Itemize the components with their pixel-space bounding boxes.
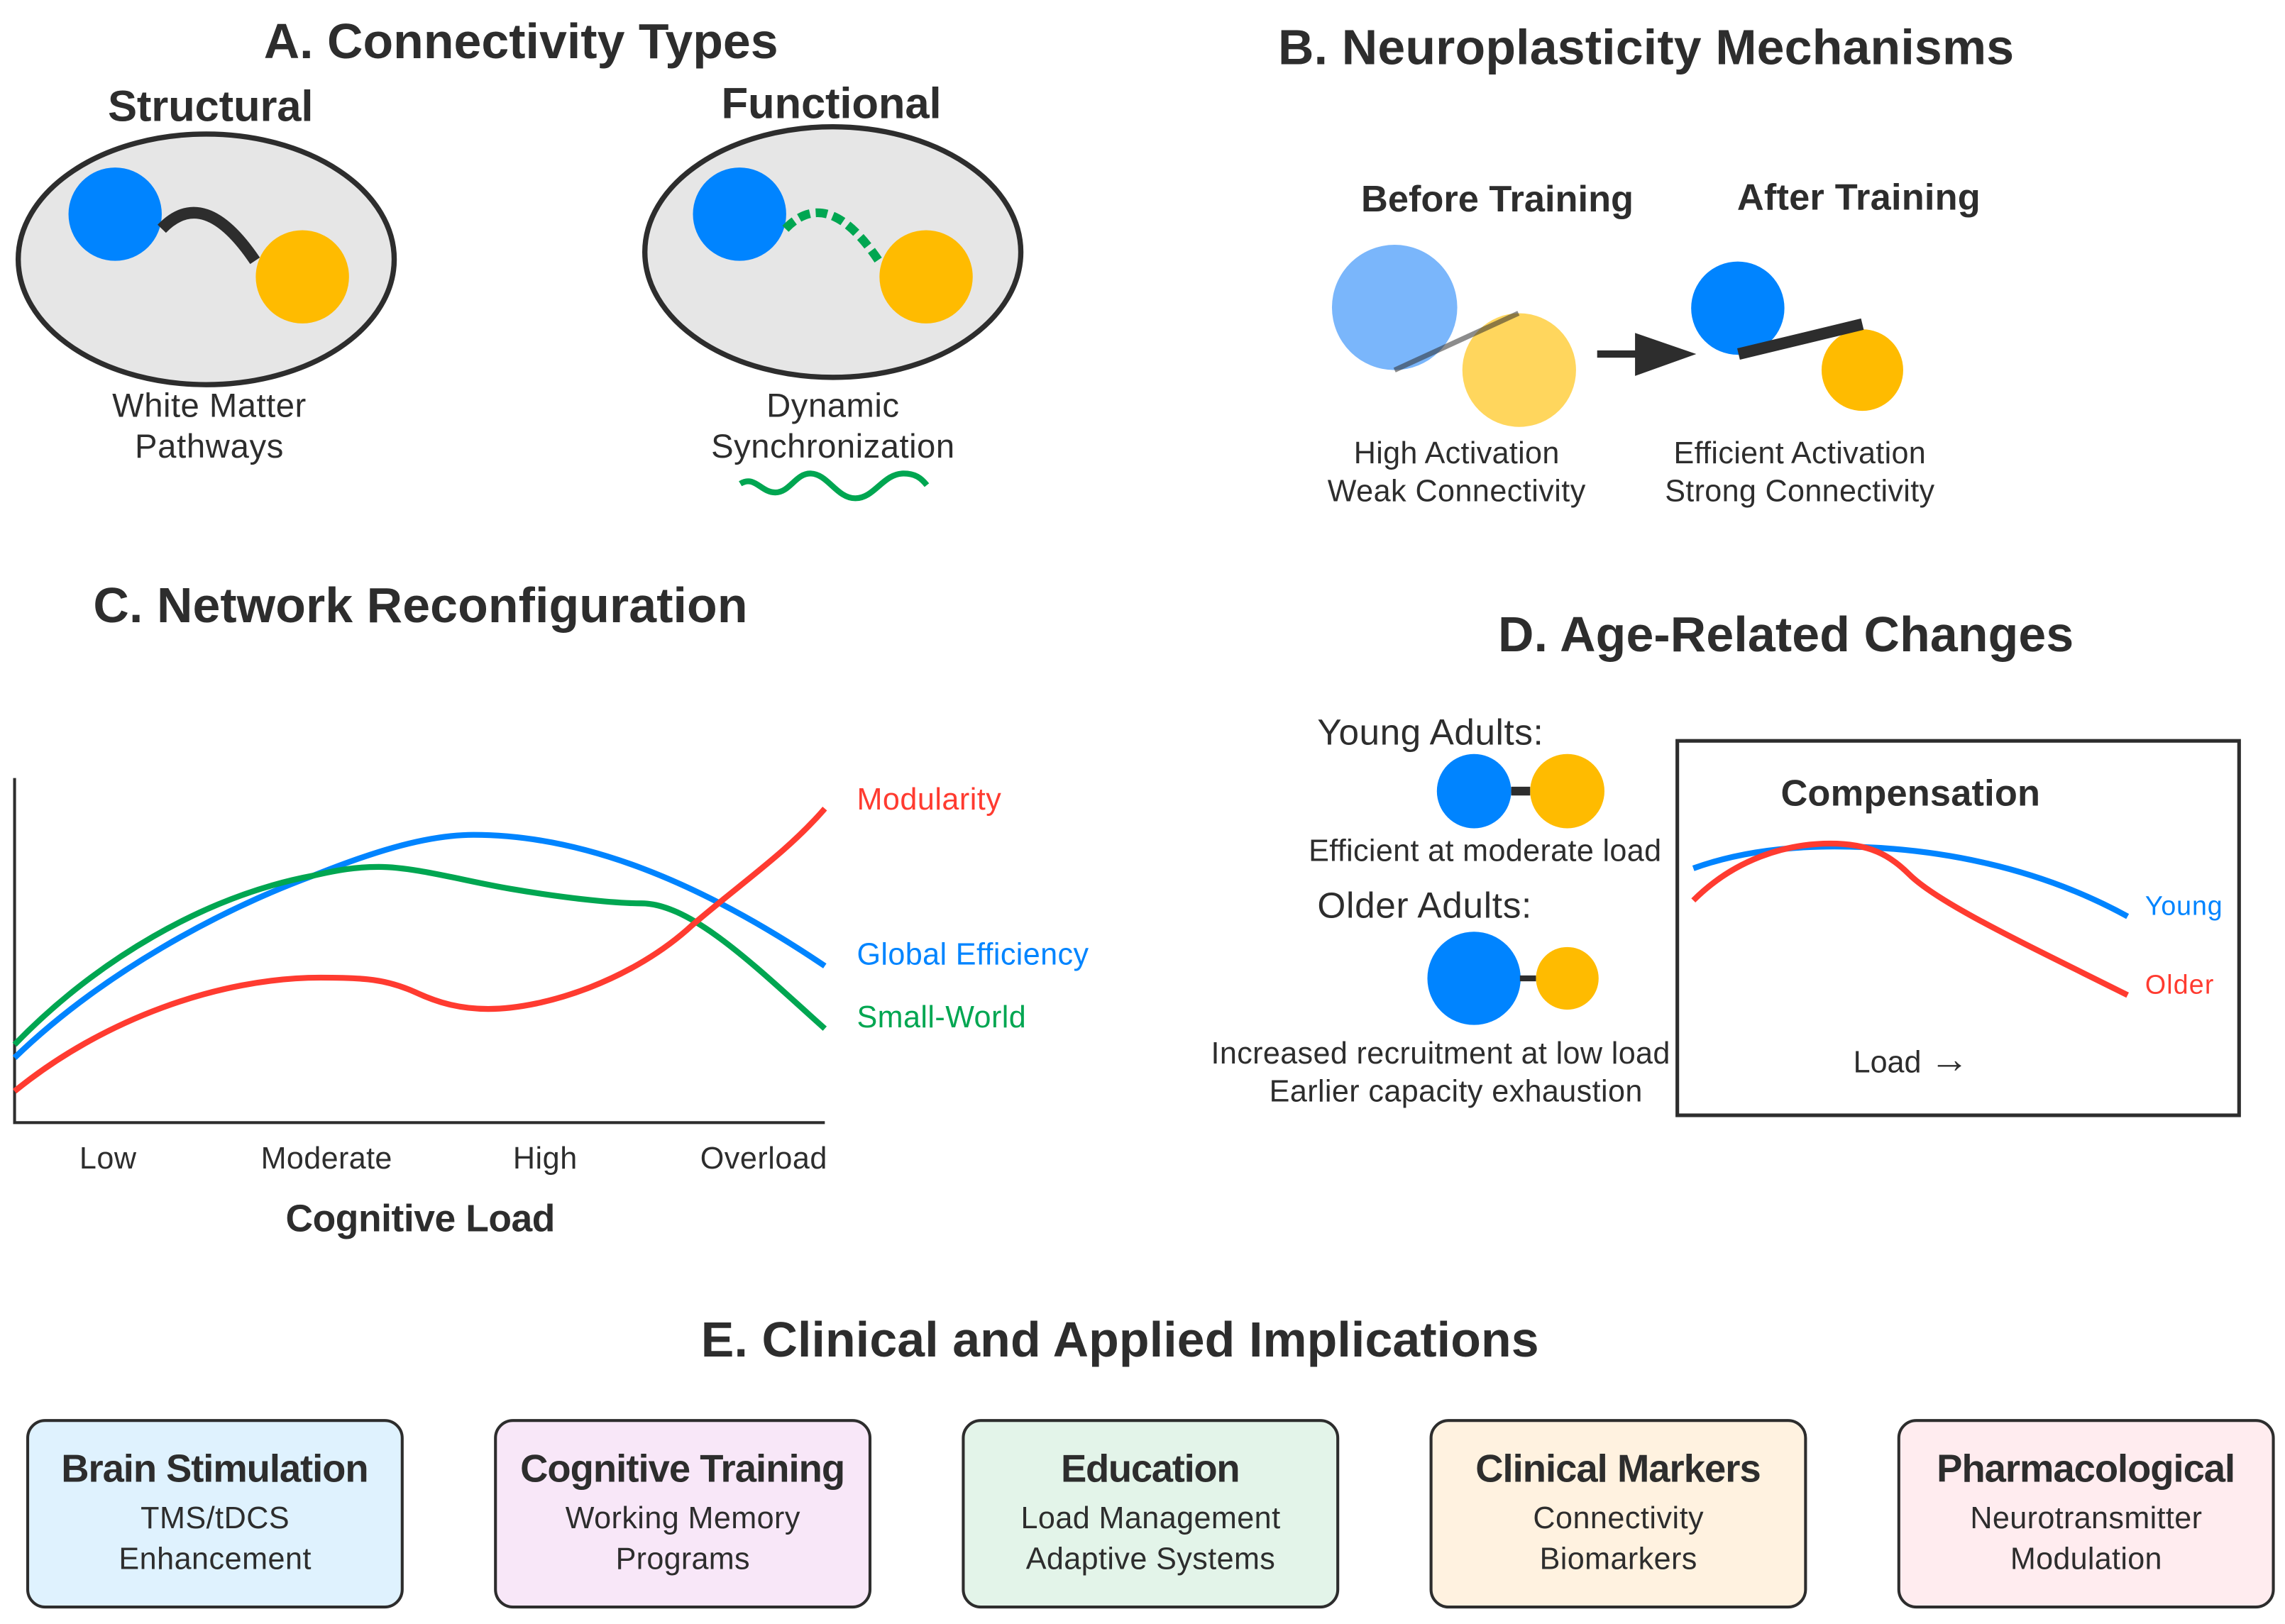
x-axis title: Cognitive Load xyxy=(286,1198,555,1239)
label: White Matter Pathways xyxy=(112,387,306,465)
card: Brain Stimulation xyxy=(28,1420,402,1607)
label: Young: Young xyxy=(2145,891,2223,921)
diagram: young adult nodes xyxy=(1437,754,1604,828)
line: small-world xyxy=(15,867,825,1044)
text: older adult description xyxy=(1211,1037,1670,1108)
heading: C. Network Reconfiguration: C. Network Reconfiguration xyxy=(93,578,747,633)
chart axes xyxy=(15,778,825,1122)
x-axis ticks: High xyxy=(513,1142,577,1176)
card: Clinical Markers: Biomarkers xyxy=(1540,1542,1697,1576)
label: Older Adults: Older Adults: xyxy=(1317,885,1531,926)
card: Clinical Markers: Clinical Markers xyxy=(1475,1447,1761,1490)
diagram: older adult nodes xyxy=(1427,932,1599,1025)
card: Education xyxy=(963,1420,1338,1607)
label: Older: Older xyxy=(2145,970,2213,1000)
label: Dynamic Synchronization: Synchronization xyxy=(711,428,954,465)
axis label: load: Load → xyxy=(1854,1037,1969,1081)
card: Pharmacological: Modulation xyxy=(2010,1542,2162,1576)
diagram: before training nodes xyxy=(1332,245,1576,427)
card: Pharmacological xyxy=(1899,1420,2274,1607)
label: before training caption: Weak Connectivity xyxy=(1328,474,1586,508)
diagram: after training nodes xyxy=(1691,262,1903,411)
panel: E. Clinical and Applied Implications xyxy=(28,1312,2274,1607)
arrow: before to after xyxy=(1597,333,1696,376)
text: efficient at moderate load: Efficient at moderate load xyxy=(1309,834,1661,868)
text: older adult description: Earlier capacity exhaustion xyxy=(1270,1074,1642,1108)
card: Cognitive Training xyxy=(495,1420,870,1607)
label: Modularity: Modularity xyxy=(857,783,1001,817)
card: Cognitive Training: Cognitive Training xyxy=(520,1447,845,1490)
line: young xyxy=(1693,846,2127,917)
chart: compensation xyxy=(1678,741,2239,1115)
label: Dynamic Synchronization: Dynamic xyxy=(766,387,899,424)
card: Clinical Markers xyxy=(1431,1420,1805,1607)
line: modularity xyxy=(15,809,825,1091)
card: Cognitive Training: Working Memory xyxy=(566,1501,800,1535)
panel: B. Neuroplasticity Mechanisms xyxy=(1278,19,2014,508)
label: after training caption: Efficient Activation xyxy=(1674,436,1926,470)
icon: synchronization wave xyxy=(740,473,927,498)
label: Young Adults: Young Adults: xyxy=(1317,712,1543,752)
label: Global Efficiency: Global Efficiency xyxy=(857,937,1089,971)
subheading: After Training: After Training xyxy=(1737,177,1981,219)
label: before training caption xyxy=(1328,436,1586,508)
label: White Matter Pathways: Pathways xyxy=(135,428,283,465)
card: Education: Education xyxy=(1061,1447,1240,1490)
card: Education: Adaptive Systems xyxy=(1026,1542,1275,1576)
heading: E. Clinical and Applied Implications: E. Clinical and Applied Implications xyxy=(701,1312,1539,1367)
x-axis ticks: Overload xyxy=(700,1142,827,1176)
x-axis ticks xyxy=(79,1142,827,1176)
card: Education: Load Management xyxy=(1021,1501,1280,1535)
heading: D. Age-Related Changes: D. Age-Related Changes xyxy=(1498,607,2074,662)
diagram: functional brain xyxy=(645,127,1021,377)
line: global efficiency xyxy=(15,835,825,1058)
diagram: structural brain xyxy=(18,134,394,385)
heading: A. Connectivity Types: A. Connectivity Types xyxy=(264,13,778,69)
card: Cognitive Training: Programs xyxy=(616,1542,750,1576)
subheading: Structural: Structural xyxy=(108,82,314,131)
card: Pharmacological: Neurotransmitter xyxy=(1970,1501,2202,1535)
card: Brain Stimulation: Enhancement xyxy=(119,1542,311,1576)
panel: D. Age-Related Changes xyxy=(1211,607,2239,1115)
chart title: Compensation xyxy=(1780,773,2040,814)
line chart: network metrics by cognitive load xyxy=(15,778,1089,1239)
label: White Matter Pathways: White Matter xyxy=(112,387,306,424)
heading: B. Neuroplasticity Mechanisms: B. Neuroplasticity Mechanisms xyxy=(1278,19,2014,74)
text: older adult description: Increased recruitment at low load xyxy=(1211,1037,1670,1071)
line: older xyxy=(1693,844,2127,995)
subheading: Before Training: Before Training xyxy=(1361,179,1634,220)
label: after training caption xyxy=(1665,436,1935,508)
card: Clinical Markers: Connectivity xyxy=(1533,1501,1704,1535)
card: Brain Stimulation: TMS/tDCS xyxy=(141,1501,290,1535)
x-axis ticks: Low xyxy=(79,1142,137,1176)
chart frame xyxy=(1678,741,2239,1115)
label: before training caption: High Activation xyxy=(1354,436,1559,470)
label: Dynamic Synchronization xyxy=(711,387,954,465)
card: Pharmacological: Pharmacological xyxy=(1937,1447,2235,1490)
panel: A. Connectivity Types xyxy=(18,13,1021,498)
card: Brain Stimulation: Brain Stimulation xyxy=(61,1447,369,1490)
label: Small-World: Small-World xyxy=(857,1000,1026,1034)
subheading: Functional: Functional xyxy=(722,79,942,128)
panel: C. Network Reconfiguration xyxy=(15,578,1089,1239)
x-axis ticks: Moderate xyxy=(261,1142,392,1176)
label: after training caption: Strong Connectivity xyxy=(1665,474,1935,508)
